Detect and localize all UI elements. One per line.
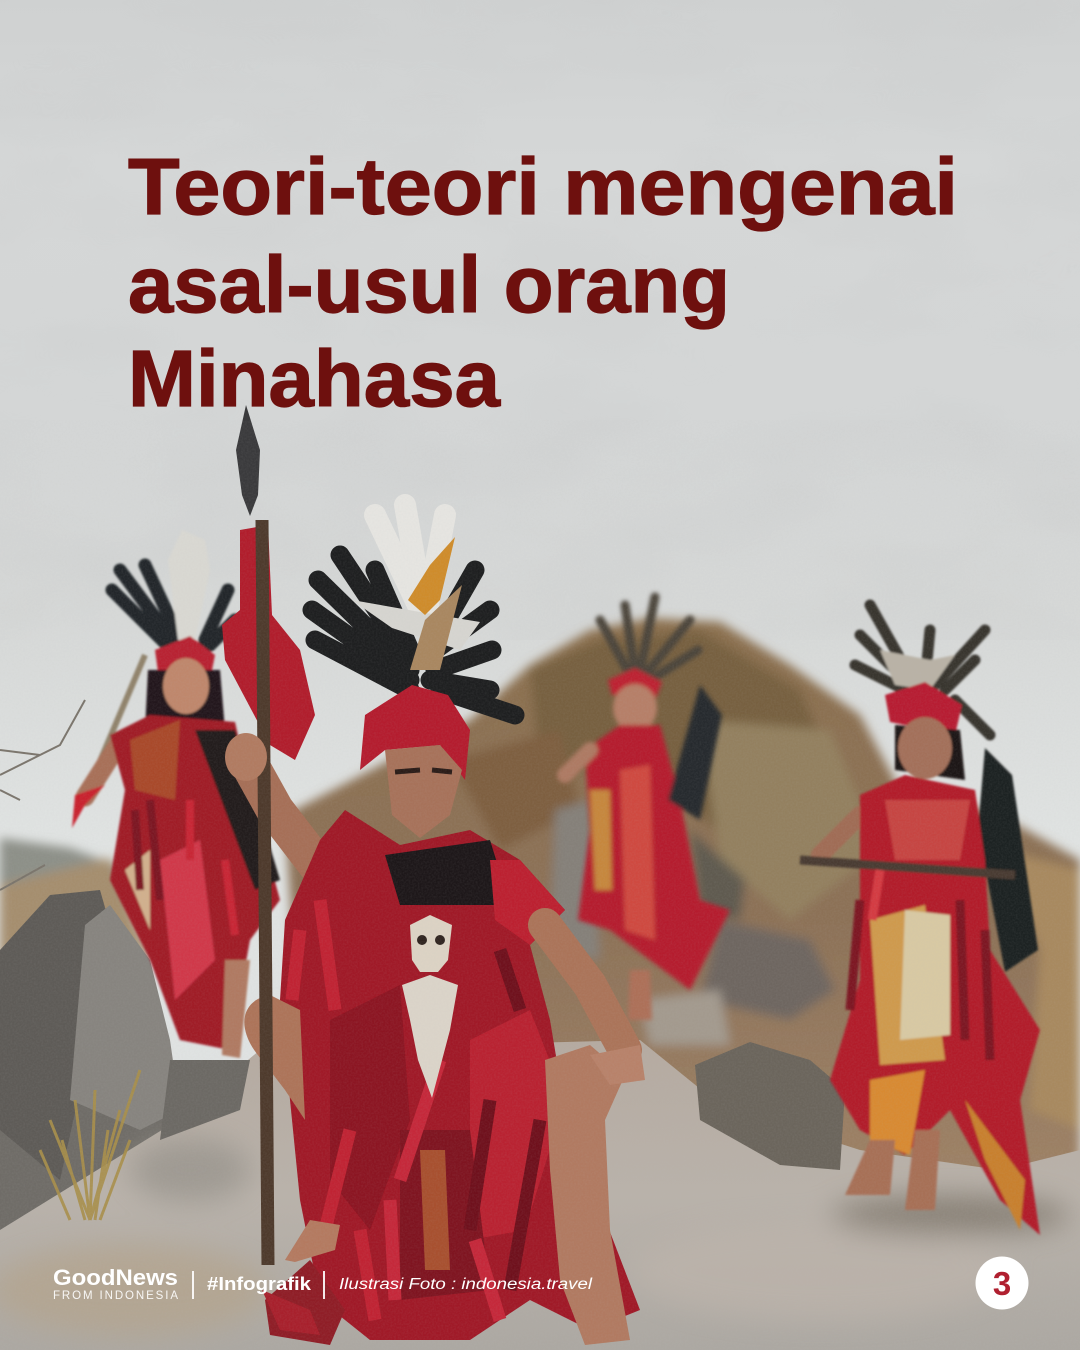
- title: [128, 142, 958, 423]
- footer divider one: [192, 1271, 194, 1299]
- figure: centre background woman: [565, 597, 730, 1020]
- boulder in the centre right: [695, 1042, 845, 1170]
- spear shaft: [262, 520, 268, 1265]
- left woman arm: [85, 745, 118, 797]
- figure: right woman: [800, 605, 1040, 1235]
- front man ribbons: [292, 900, 590, 1320]
- front man hand: [590, 1045, 645, 1085]
- footer logo: GoodNews from Indonesia: GoodNews: [53, 1265, 178, 1290]
- sky haze texture: [0, 0, 1080, 640]
- right woman arm: [820, 815, 860, 855]
- left woman feather headdress: [112, 565, 235, 650]
- title: asal-usul orang: [128, 240, 730, 329]
- right woman dress: [830, 775, 1040, 1235]
- front man hornbill beak: [408, 537, 455, 615]
- centre woman hat: [608, 668, 662, 700]
- front man raised knee: [244, 995, 305, 1120]
- red fabric around spear: [222, 525, 315, 760]
- left woman dress: [110, 715, 280, 1050]
- front man black feathers: [312, 555, 515, 715]
- figure: left woman: [72, 530, 280, 1058]
- front man animal skull: [402, 975, 458, 1098]
- footer logo: GoodNews from Indonesia: [53, 1265, 178, 1302]
- right woman hat: [885, 682, 962, 735]
- film grain over photo: [0, 420, 1080, 1350]
- photo scene: rocky ground: [0, 1040, 1080, 1350]
- front man red costume: [280, 810, 640, 1340]
- centre woman headdress: [600, 597, 698, 680]
- boulders on the left: [0, 890, 250, 1180]
- left woman hat: [155, 636, 215, 680]
- footer photo credit: Ilustrasi Foto : indonesia.travel: [339, 1276, 593, 1293]
- front man raised arm: [250, 765, 325, 875]
- right woman ribbons: [850, 870, 990, 1060]
- spear base wrap: [262, 1290, 320, 1335]
- centre woman shield: [668, 685, 722, 820]
- left woman hair and face: [145, 670, 225, 730]
- centre woman arm: [565, 750, 590, 775]
- dry grass tuft: [40, 1070, 140, 1220]
- page number badge: [976, 1256, 1028, 1310]
- front man white feathers: [375, 505, 445, 620]
- right woman legs: [845, 1140, 895, 1195]
- rock path shading: [0, 1138, 1070, 1335]
- footer hashtag: #Infografik: [207, 1274, 312, 1294]
- right woman hair and face: [895, 725, 965, 780]
- front man face: [385, 745, 462, 838]
- front man right arm: [545, 925, 625, 1050]
- title: Minahasa: [128, 334, 501, 423]
- footer logo: GoodNews from Indonesia: FROM INDONESIA: [53, 1290, 178, 1302]
- photo scene: distant land and hill: [0, 618, 1080, 1220]
- front man hand on spear: [225, 733, 267, 781]
- right woman feather headdress: [855, 605, 990, 735]
- page number badge: 3: [993, 1265, 1011, 1302]
- bare branch: [0, 700, 85, 890]
- front man red hat: [360, 685, 470, 780]
- spear blade: [236, 405, 260, 516]
- left woman ribbons: [135, 800, 235, 935]
- front man lower left foot: [285, 1220, 340, 1262]
- front man skull pendant: [410, 915, 452, 972]
- centre woman dress: [578, 725, 730, 990]
- right woman sword: [800, 860, 1015, 875]
- front man right leg: [545, 1045, 630, 1345]
- dark ground behind left boulders: [0, 1060, 220, 1240]
- front man white wing stripe: [352, 600, 480, 650]
- title: Teori-teori mengenai: [128, 142, 958, 231]
- left woman spear: [92, 655, 145, 780]
- right woman shield: [978, 748, 1038, 972]
- footer divider two: [323, 1271, 325, 1299]
- figure: front seated man: [222, 405, 645, 1345]
